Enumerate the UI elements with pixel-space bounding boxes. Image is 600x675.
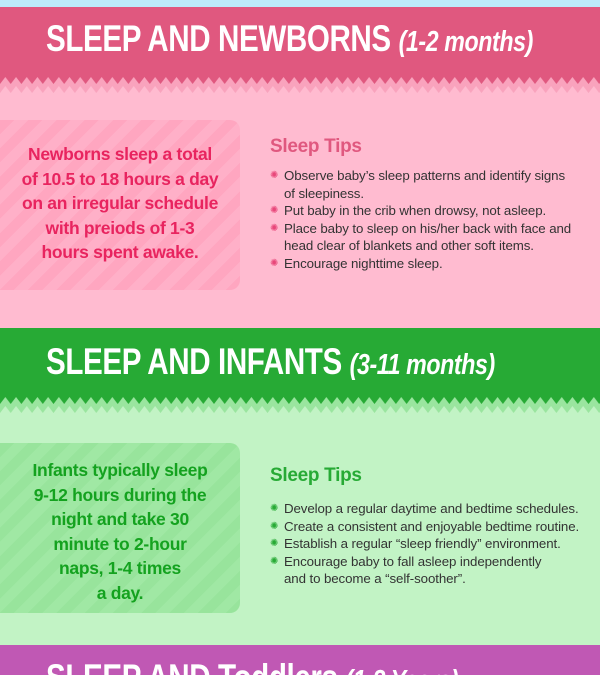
- callout: infant sleep: night and take 30: [51, 509, 189, 529]
- top strip: [0, 0, 600, 7]
- text block: newborn tips: [270, 136, 571, 270]
- text block: newborn tips: Place baby to sleep on his/her back with face and: [284, 220, 571, 236]
- panel: infants: [0, 328, 600, 645]
- text block: newborn tips: Encourage nighttime sleep.: [284, 256, 443, 270]
- text block: infant tips: Sleep Tips: [270, 465, 362, 486]
- text block: infant tips: Encourage baby to fall asleep independently: [284, 554, 541, 568]
- text block: infant tips: and to become a “self-soother”.: [284, 571, 466, 586]
- callout: newborn sleep: hours spent awake.: [41, 242, 198, 262]
- text block: newborn tips: Sleep Tips: [270, 136, 362, 157]
- text block: newborn tips: Observe baby’s sleep patterns and identify signs: [284, 168, 565, 183]
- text block: infant tips: Establish a regular “sleep friendly” environment.: [284, 536, 561, 551]
- text block: infant tips: Develop a regular daytime and bedtime schedules.: [284, 501, 579, 516]
- callout: infant sleep: [0, 443, 240, 613]
- panel: newborns: [0, 7, 600, 328]
- callout: infant sleep: naps, 1-4 times: [59, 558, 181, 578]
- panel: toddlers: [0, 645, 600, 675]
- callout: infant sleep: Infants typically sleep: [32, 460, 207, 480]
- heading: newborns: SLEEP AND NEWBORNS (1-2 months): [46, 18, 533, 59]
- callout: newborn sleep: [0, 120, 240, 290]
- text block: newborn tips: Put baby in the crib when drowsy, not asleep.: [284, 203, 546, 218]
- text block: infant tips: Create a consistent and enjoyable bedtime routine.: [284, 518, 579, 534]
- text block: newborn tips: head clear of blankets and other soft items.: [284, 238, 534, 253]
- text block: infant tips: [270, 465, 579, 586]
- callout: infant sleep: minute to 2-hour: [53, 534, 187, 554]
- callout: newborn sleep: with preiods of 1-3: [46, 218, 194, 238]
- callout: newborn sleep: on an irregular schedule: [22, 193, 218, 213]
- callout: infant sleep: a day.: [97, 582, 143, 602]
- callout: infant sleep: 9-12 hours during the: [34, 484, 206, 504]
- callout: newborn sleep: Newborns sleep a total: [28, 144, 212, 164]
- callout: newborn sleep: of 10.5 to 18 hours a day: [22, 168, 218, 188]
- text block: newborn tips: of sleepiness.: [284, 186, 364, 200]
- heading: infants: SLEEP AND INFANTS (3-11 months): [46, 341, 495, 382]
